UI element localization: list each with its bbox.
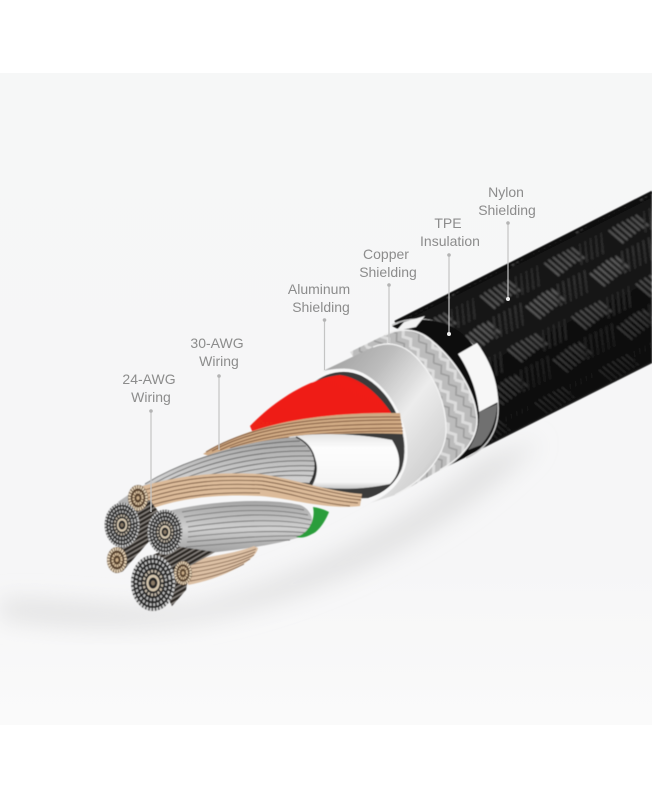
dark wire bodies: [128, 500, 160, 548]
nylon shielding sleeve: [395, 192, 652, 457]
copper wire upper: [203, 413, 403, 456]
green wire: [296, 507, 329, 538]
label: 30-AWG Wiring: Wiring: [199, 353, 239, 369]
label: 30-AWG Wiring: [190, 335, 244, 450]
label: Copper Shielding: Copper: [363, 246, 409, 262]
label: 24-AWG Wiring: Wiring: [131, 389, 171, 405]
cable illustration: [101, 192, 652, 617]
cable interior: [260, 372, 404, 500]
grey wire lower: [165, 501, 313, 556]
label: TPE Insulation: Insulation: [420, 233, 480, 249]
label: 24-AWG Wiring: 24-AWG: [122, 371, 176, 387]
red wire: [250, 375, 392, 438]
label: Copper Shielding: [359, 246, 417, 343]
label: Nylon Shielding: [478, 184, 536, 301]
label: Aluminum Shielding: Shielding: [292, 299, 350, 315]
tip: grey strand centre: [144, 505, 186, 559]
label: TPE Insulation: TPE: [434, 215, 462, 231]
label: Nylon Shielding: Shielding: [478, 202, 536, 218]
label: Copper Shielding: Shielding: [359, 264, 417, 280]
copper shielding braid: [350, 330, 477, 490]
tip: grey strand large: [126, 549, 180, 617]
tip: copper strand small left: [105, 545, 129, 575]
TPE insulation: [392, 316, 498, 470]
nylon sleeve end ring: [392, 319, 498, 458]
label: Aluminum Shielding: [288, 281, 350, 370]
grey wire upper: [118, 437, 315, 520]
tip: copper strand small right: [173, 559, 193, 587]
label: 24-AWG Wiring: [122, 371, 176, 512]
white core: [288, 434, 399, 489]
aluminum shielding: [312, 344, 446, 503]
tip: grey strand left: [101, 498, 143, 552]
label: Nylon Shielding: Nylon: [488, 184, 524, 200]
cast shadow: [0, 440, 540, 627]
tip: copper strand small top: [126, 483, 150, 513]
label: TPE Insulation: [420, 215, 480, 336]
label: Aluminum Shielding: Aluminum: [288, 281, 350, 297]
copper wire lower: [186, 546, 258, 585]
label: 30-AWG Wiring: 30-AWG: [190, 335, 244, 351]
copper wire middle: [140, 473, 362, 510]
